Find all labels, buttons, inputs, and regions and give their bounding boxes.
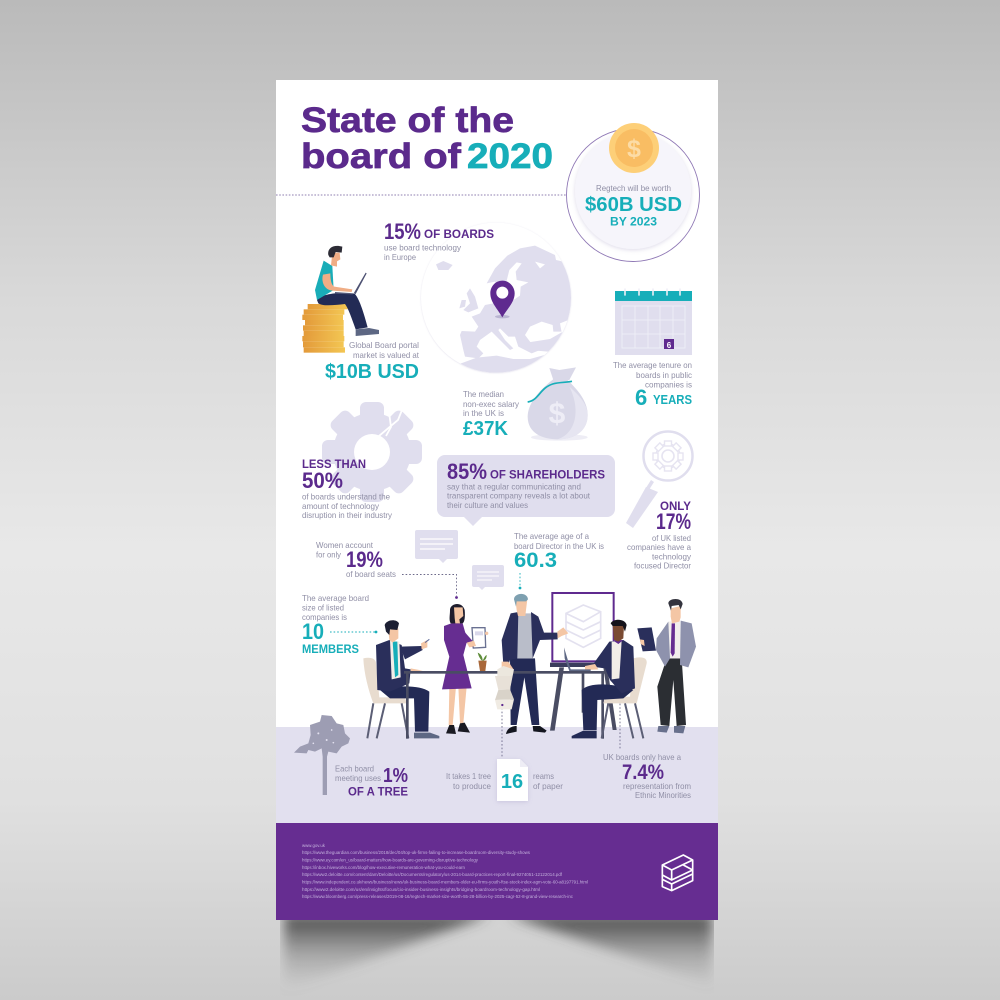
- icon: paper: 16: [501, 771, 523, 793]
- stat: 7.4%: Ethnic Minorities: [635, 790, 691, 800]
- poster: [276, 80, 718, 920]
- stat: women: [316, 540, 396, 579]
- stat: board size: MEMBERS: [302, 642, 359, 656]
- stat: 1% of a tree: [335, 764, 408, 798]
- stat: women: 19%: [346, 547, 383, 572]
- person: seated man left: [376, 620, 439, 738]
- title: 2020: [467, 137, 553, 176]
- panel: europe map: [420, 240, 572, 374]
- icon: speech bubble small: [472, 565, 504, 590]
- illustration: man on coins: [302, 246, 379, 353]
- text block: sources: https://www.independent.co.uk/news/business/news/uk-business-board-members-older-eu-firms-youth-ftse-stock-index-agm-vote-60-a8197791.html: [302, 880, 588, 884]
- stat: age: [514, 531, 604, 572]
- stat: less than 50%: LESS THAN: [302, 457, 366, 471]
- stat: only 17%: companies have a: [627, 542, 691, 552]
- icon: coin: $: [627, 135, 641, 163]
- callout: 85% of shareholders: [437, 455, 615, 526]
- title: board of: [301, 137, 461, 176]
- stat: only 17%: technology: [652, 552, 692, 562]
- person: woman: [442, 604, 488, 734]
- stat: only 17%: of UK listed: [652, 533, 691, 543]
- callout: 85% of shareholders: OF SHAREHOLDERS: [490, 468, 605, 482]
- arrows: dotted connectors: [330, 573, 620, 758]
- stat: women: Women account: [316, 540, 374, 550]
- icon: tree: [294, 715, 350, 795]
- stat: 16 reams: of paper: [533, 781, 563, 791]
- person: standing man right: [637, 599, 696, 733]
- stat: tenure: boards in public: [636, 370, 693, 380]
- plant: [478, 653, 487, 671]
- stat: 7.4%: 7.4%: [622, 761, 664, 784]
- illustration: board meeting: [363, 593, 696, 739]
- title: State of the: [301, 101, 514, 140]
- seated man left chair: [363, 658, 408, 738]
- person: presenter: [502, 594, 568, 734]
- stat: 15% of boards: 15%: [384, 219, 421, 244]
- callout: 85% of shareholders: their culture and values: [447, 500, 528, 510]
- stat: less than 50%: disruption in their industry: [302, 510, 393, 520]
- person: seated man right: [564, 620, 635, 738]
- stat: only 17%: 17%: [656, 509, 691, 534]
- stat: tenure: [613, 360, 693, 410]
- stat: 15% of boards: [384, 219, 494, 262]
- stat: board size: size of listed: [302, 602, 344, 612]
- folded paper: [495, 666, 514, 709]
- title: [301, 101, 553, 176]
- stat: age: The average age of a: [514, 531, 589, 541]
- stat: 15% of boards: OF BOARDS: [424, 227, 494, 241]
- text block: sources: https://www2.deloitte.com/us/en/insights/focus/cio-insider-business-insights/bridging-boardroom-technology-gap.html: [302, 887, 540, 892]
- stat: salary: in the UK is: [463, 408, 504, 418]
- stat: 16 reams: reams: [533, 771, 554, 781]
- logo: [662, 855, 693, 891]
- icon: money bag: [528, 367, 588, 441]
- stat: salary: [463, 389, 520, 440]
- callout: 85% of shareholders: 85%: [447, 459, 487, 484]
- stat: board size: companies is: [302, 612, 347, 622]
- text block: sources: https://www.bloomberg.com/press-releases/2019-08-16/regtech-market-size-worth-55-28-billion-by-2025-cagr-52-8-grand-view-research-inc: [302, 894, 574, 899]
- stat: salary: non-exec salary: [463, 399, 520, 409]
- stat: salary: £37K: [463, 418, 509, 440]
- stat: 1% of a tree: meeting uses: [335, 773, 381, 783]
- panel: regtech: [566, 123, 700, 262]
- stat: less than 50%: amount of technology: [302, 501, 380, 511]
- table: [404, 671, 608, 739]
- stat: 16 reams: to produce: [453, 781, 491, 791]
- stat: only 17%: ONLY: [660, 499, 691, 513]
- stat: $10B: [325, 340, 420, 383]
- stat: $10B: market is valued at: [353, 350, 420, 360]
- callout: 85% of shareholders: transparent company reveals a lot about: [447, 490, 591, 500]
- text block: sources: https://www.theguardian.com/business/2018/dec/04/top-uk-firms-failing-to-increase-boardroom-diversity-study-shows: [302, 850, 531, 855]
- stat: tenure: YEARS: [653, 392, 692, 407]
- icon: money bag: $: [549, 397, 566, 430]
- panel: regtech: $60B USD: [585, 194, 682, 216]
- callout: 85% of shareholders: say that a regular communicating and: [447, 482, 581, 492]
- icon: calendar: 6: [667, 341, 672, 350]
- stat: only 17%: [627, 499, 692, 570]
- stat: 15% of boards: use board technology: [384, 242, 462, 252]
- icon: map pin: [490, 281, 515, 318]
- stat: women: of board seats: [346, 569, 396, 579]
- text block: sources: www.gov.uk: [302, 843, 326, 848]
- man: [315, 246, 379, 336]
- coin stack: [302, 304, 348, 353]
- band: lower section: [276, 727, 718, 823]
- stat: board size: [302, 593, 369, 656]
- stat: 7.4%: representation from: [623, 781, 691, 791]
- icon: magnifier: [626, 432, 692, 528]
- dots on connectors: [375, 587, 521, 633]
- stat: only 17%: focused Director: [634, 560, 691, 570]
- panel: regtech: BY 2023: [610, 214, 657, 228]
- stat: 16 reams: It takes 1 tree: [446, 771, 491, 781]
- text block: sources: https://inbox.hiveworks.com/blog/how-executive-remuneration-what-you-could-earn: [302, 865, 466, 870]
- stat: less than 50%: [302, 457, 393, 520]
- icon: speech bubble large: [415, 530, 458, 563]
- stat: board size: The average board: [302, 593, 369, 603]
- stat: 7.4%: UK boards only have a: [603, 752, 681, 762]
- stat: tenure: companies is: [645, 380, 692, 390]
- stat: 1% of a tree: 1%: [383, 765, 408, 787]
- stat: $10B: Global Board portal: [349, 340, 419, 350]
- text block: sources: https://www.ey.com/en_us/board-matters/how-boards-are-governing-disruptive-technology: [302, 858, 479, 862]
- stat: 1% of a tree: Each board: [335, 764, 374, 774]
- stat: less than 50%: 50%: [302, 468, 343, 493]
- stat: age: 60.3: [514, 549, 557, 572]
- stat: board size: 10: [302, 619, 324, 644]
- stat: 15% of boards: in Europe: [384, 252, 416, 262]
- icon: calendar: [615, 289, 692, 355]
- stat: less than 50%: of boards understand the: [302, 492, 390, 502]
- stat: salary: The median: [463, 389, 504, 399]
- stat: 16 reams: [446, 759, 563, 801]
- stat: women: for only: [316, 550, 342, 560]
- footer: [276, 823, 718, 920]
- stat: tenure: The average tenure on: [613, 360, 692, 370]
- stat: age: board Director in the UK is: [514, 541, 604, 551]
- stat: 7.4%: [603, 752, 691, 800]
- seated man right chair: [602, 657, 647, 738]
- stat: 1% of a tree: OF A TREE: [348, 784, 408, 798]
- text block: sources: [302, 843, 588, 899]
- stat: tenure: 6: [635, 385, 647, 410]
- poster shadow: [280, 920, 714, 980]
- text block: sources: https://www2.deloitte.com/content/dam/Deloitte/us/Documents/regulatory/us-2014-board-practices-report-final-9274051-12122014.pdf: [302, 872, 563, 877]
- panel: regtech: Regtech will be worth: [596, 183, 671, 193]
- stat: $10B: $10B USD: [325, 361, 419, 383]
- whiteboard: [550, 593, 617, 731]
- icon: broken gear: [322, 402, 422, 502]
